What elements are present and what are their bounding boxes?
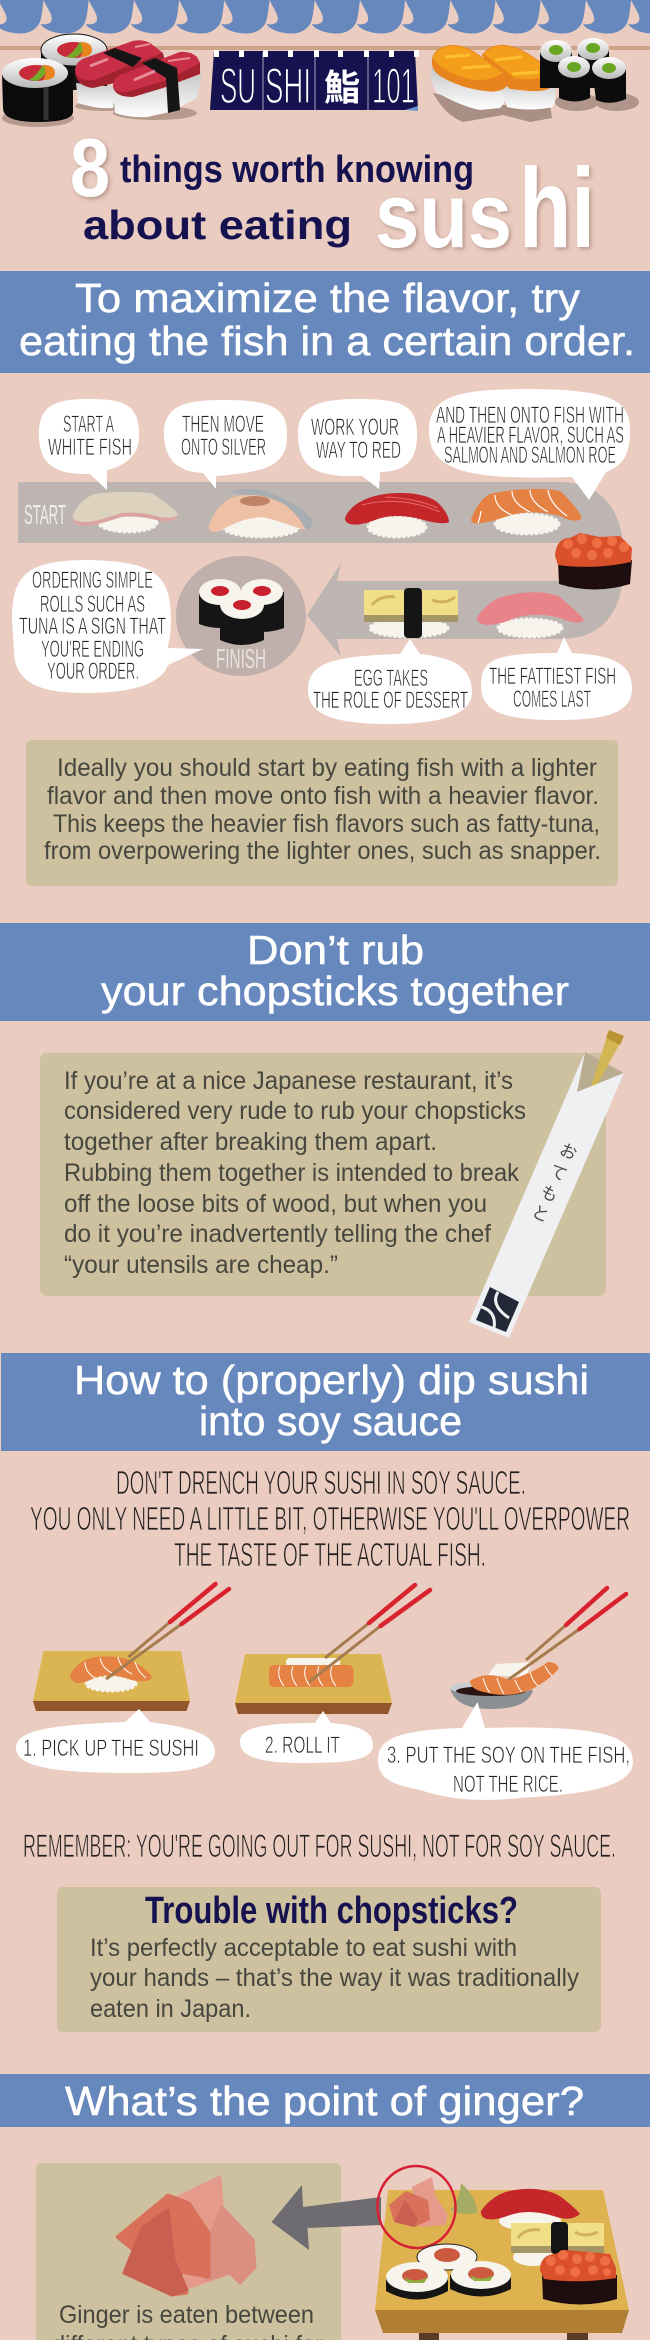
- band: ginger heading: [0, 2074, 650, 2127]
- banner text: SHI: [265, 58, 311, 114]
- step 3: soy on fish: [378, 1588, 633, 1800]
- band: soy sauce heading: How to (properly) dip sushi: [74, 1357, 589, 1403]
- panel: order explanation: from overpowering the lighter ones, such as snapper.: [44, 837, 601, 865]
- bubble: simple rolls: ORDERING SIMPLE: [32, 567, 153, 594]
- illustration: sushi tray: [372, 2161, 629, 2340]
- panel: sushi order flow: [12, 389, 632, 724]
- panel: ginger explanation: Ginger is eaten between: [59, 2301, 314, 2329]
- bubble: red: [298, 399, 417, 489]
- panel: trouble with chopsticks: [57, 1887, 601, 2032]
- banner text: [220, 58, 415, 114]
- title: [70, 121, 595, 271]
- band: soy sauce heading: [1, 1353, 650, 1451]
- panel: chopsticks text: If you’re at a nice Japanese restaurant, it’s: [64, 1067, 513, 1095]
- panel: chopsticks text: [40, 1053, 606, 1296]
- title word sushi: sus: [375, 165, 512, 267]
- bubble: roll it: [240, 1711, 373, 1763]
- title number 8: 8: [70, 121, 110, 214]
- sushi: tray tuna: [481, 2189, 580, 2231]
- conveyor arrow: [18, 482, 624, 657]
- panel: trouble with chopsticks: eaten in Japan.: [90, 1995, 251, 2023]
- bubble: white fish: [39, 399, 139, 490]
- maki rolls finish: [199, 579, 284, 645]
- panel: trouble with chopsticks: It’s perfectly acceptable to eat sushi with: [90, 1934, 517, 1962]
- bubble: white fish: WHITE FISH: [48, 434, 132, 461]
- band: ginger heading: What’s the point of ginger?: [65, 2078, 584, 2124]
- step 2: roll it: [235, 1585, 430, 1763]
- banner tabs: [214, 50, 419, 57]
- panel: trouble with chopsticks: your hands – that’s the way it was traditionally: [90, 1964, 579, 1992]
- finish circle: [176, 556, 306, 676]
- bubble: pick up: [16, 1709, 215, 1773]
- text: soy sauce advice: [30, 1464, 630, 1573]
- sushi: salmon roe: [555, 533, 632, 590]
- band: eating order heading: [0, 271, 650, 373]
- panel: chopsticks text: together after breaking them apart.: [64, 1128, 437, 1156]
- panel: chopsticks text: Rubbing them together is intended to break: [64, 1159, 519, 1187]
- banner text: 101: [372, 58, 415, 114]
- sushi: tray egg: [511, 2222, 604, 2266]
- title word sushi: [375, 145, 595, 271]
- panel: chopsticks text: off the loose bits of wood, but when you: [64, 1190, 487, 1218]
- sushi: tray rolls: [386, 2244, 511, 2300]
- title line one: things worth knowing: [120, 149, 474, 191]
- wave border: [0, 0, 650, 34]
- bubble: silver: THEN MOVE: [182, 411, 264, 438]
- band: chopsticks heading: your chopsticks together: [101, 968, 569, 1014]
- title word sushi: hi: [519, 145, 595, 271]
- bubble: heavier flavor: [429, 389, 630, 500]
- header sushi left: [2, 34, 202, 127]
- sushi: tray roe: [540, 2250, 617, 2304]
- panel: sushi order flow: START: [24, 499, 66, 530]
- band: eating order heading: eating the fish in a certain order.: [19, 318, 635, 364]
- bubble: silver: [164, 400, 287, 489]
- panel: order explanation: This keeps the heavier fish flavors such as fatty-tuna,: [53, 810, 600, 838]
- band: chopsticks heading: [0, 923, 650, 1021]
- bubble: soy on fish: NOT THE RICE.: [453, 1771, 563, 1798]
- icon: chopsticks envelope: [469, 1030, 624, 1338]
- tuna nigiri front: [113, 52, 202, 120]
- bubble: pick up: 1. PICK UP THE SUSHI: [23, 1735, 199, 1762]
- salmon nigiri: [431, 45, 556, 122]
- back roll: [41, 34, 107, 90]
- envelope logo: [476, 1287, 519, 1332]
- band: soy sauce heading: into soy sauce: [199, 1398, 462, 1444]
- band: eating order heading: To maximize the flavor, try: [75, 275, 581, 321]
- bubble: simple rolls: YOUR ORDER.: [47, 658, 139, 685]
- bubble: roll it: 2. ROLL IT: [265, 1732, 340, 1759]
- bubble: egg: [308, 639, 472, 724]
- bubble: silver: ONTO SILVER: [181, 434, 266, 461]
- bubble: white fish: START A: [63, 411, 114, 438]
- circle highlight: [372, 2161, 461, 2253]
- sushi: salmon: [471, 489, 582, 534]
- icon: ginger large: [117, 2177, 255, 2295]
- bubble: soy on fish: [378, 1702, 633, 1800]
- banner text: SU: [220, 58, 256, 114]
- sushi: silver: [209, 489, 313, 537]
- title line two: about eating: [83, 202, 352, 248]
- tuna nigiri back: [75, 40, 165, 111]
- step 1: pick up: [16, 1584, 229, 1773]
- panel: chopsticks text: “your utensils are cheap.”: [64, 1251, 338, 1279]
- icon: small ginger: [389, 2177, 448, 2227]
- panel: order explanation: Ideally you should start by eating fish with a lighter: [57, 754, 597, 782]
- sushi: tuna: [345, 493, 449, 537]
- sushi: egg: [364, 588, 458, 638]
- noren banner: [210, 50, 419, 114]
- bubble: simple rolls: TUNA IS A SIGN THAT: [19, 613, 166, 640]
- panel: ginger explanation: [36, 2163, 341, 2340]
- band: chopsticks heading: Don’t rub: [247, 927, 424, 973]
- bubble: simple rolls: YOU'RE ENDING: [41, 636, 144, 663]
- panel: chopsticks text: do it you’re inadvertently telling the chef: [64, 1220, 491, 1248]
- bubble: egg: THE ROLE OF DESSERT: [313, 687, 468, 714]
- bubble: red: WORK YOUR: [311, 414, 399, 441]
- arrow: ginger pointer: [272, 2185, 381, 2250]
- front roll: [2, 58, 73, 122]
- envelope text: と: [529, 1202, 552, 1226]
- label: finish: FINISH: [216, 643, 266, 674]
- envelope text: お: [557, 1140, 580, 1164]
- bubble: egg: EGG TAKES: [354, 665, 428, 692]
- bubble: fattiest fish: [481, 637, 632, 720]
- panel heading: Trouble with chopsticks?: [145, 1890, 518, 1932]
- panel: chopsticks text: considered very rude to rub your chopsticks: [64, 1097, 526, 1125]
- icon: wasabi: [450, 2183, 477, 2214]
- sushi: white fish: [73, 492, 178, 532]
- panel: order explanation: [26, 740, 618, 886]
- maki rolls right: [540, 38, 639, 111]
- bubble: simple rolls: ROLLS SUCH AS: [40, 591, 145, 618]
- bubble: simple rolls: [12, 560, 203, 693]
- envelope text: [529, 1140, 580, 1226]
- envelope text: も: [538, 1182, 561, 1206]
- banner text: 鮨: [324, 67, 360, 108]
- bubble: red: WAY TO RED: [316, 437, 401, 464]
- panel: order explanation: flavor and then move onto fish with a heavier flavor.: [47, 782, 599, 810]
- envelope text: て: [547, 1161, 570, 1185]
- sushi: fatty tuna: [477, 592, 584, 637]
- header sushi right: [431, 38, 639, 122]
